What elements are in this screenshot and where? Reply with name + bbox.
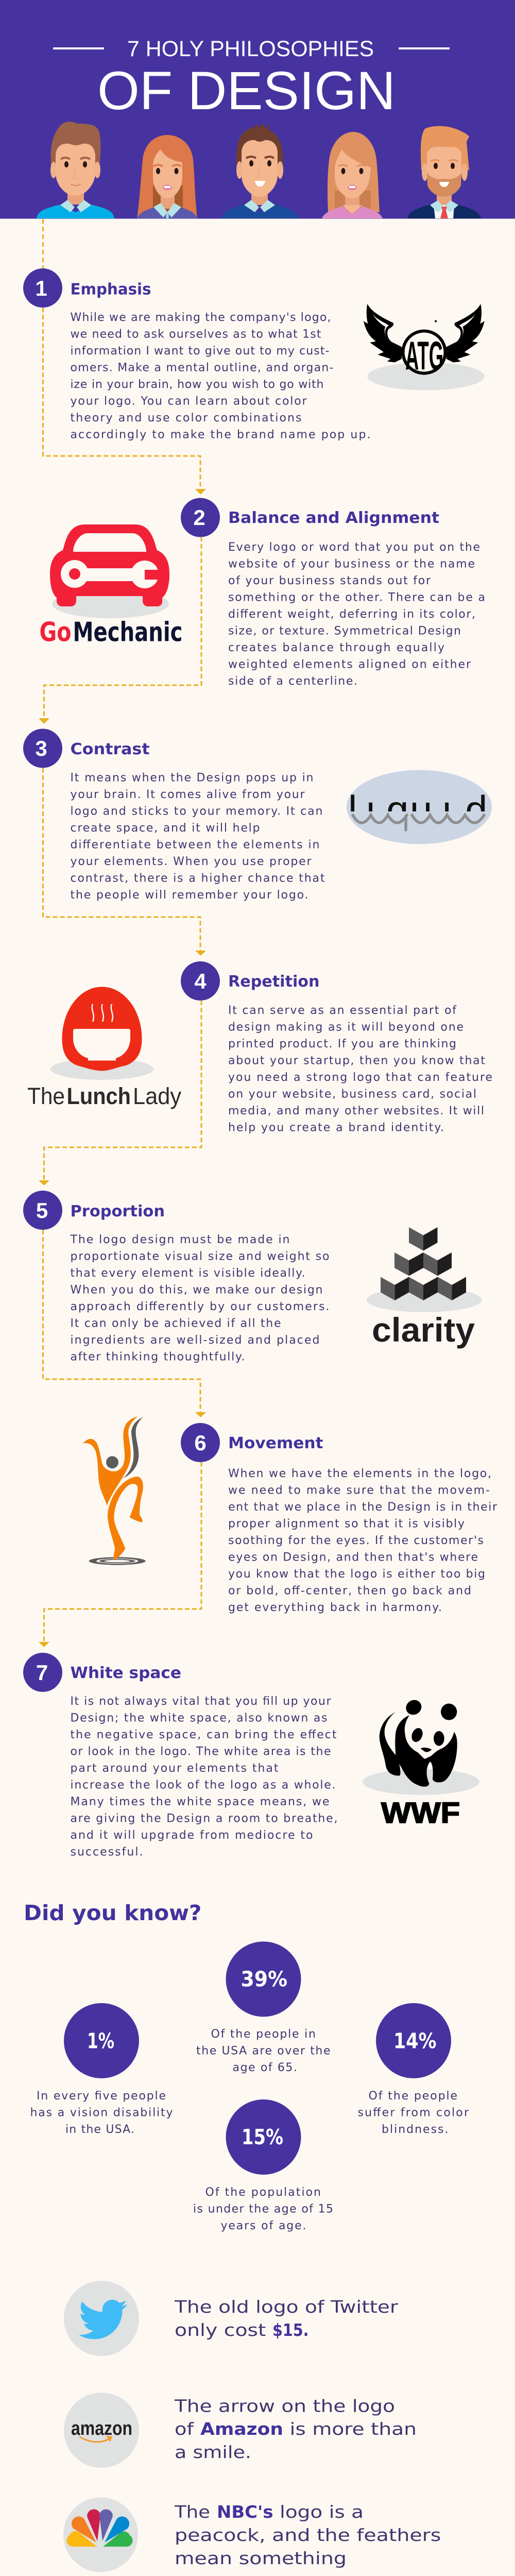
body text: accordingly to make the brand name pop up. — [70, 429, 370, 441]
body text: information I want to give out to my cust- — [70, 345, 330, 358]
body text: are giving the Design a room to breathe, — [70, 1812, 338, 1825]
body text: It can serve as an essential part of — [228, 1004, 457, 1017]
logo: GoMechanic — [39, 524, 182, 648]
body text — [228, 1467, 497, 1614]
body text: weighted elements aligned on either — [228, 658, 471, 671]
illustration: person five — [407, 126, 481, 218]
body text: eyes on Design, and then that's where — [228, 1551, 478, 1564]
logo: GoMechanic: Go — [39, 617, 71, 648]
number badge 6: 6 — [194, 1431, 207, 1455]
body text: different weight, deferring in its color, — [228, 608, 475, 621]
fact: twitter — [64, 2281, 399, 2356]
stat: 1 percent: has a vision disability — [30, 2106, 173, 2120]
body text: theory and use color combinations — [70, 412, 302, 425]
logo: The Lunch Lady: The — [27, 1083, 65, 1109]
logo: clarity: clarity — [372, 1311, 475, 1349]
stat: 14 percent — [357, 2003, 469, 2136]
heading: white space: White space — [70, 1664, 181, 1682]
body text: It can only be achieved if all the — [70, 1317, 281, 1330]
logo: ATG: ATG — [405, 333, 443, 378]
stat: 1 percent — [30, 2003, 173, 2136]
stat: 15 percent: years of age. — [220, 2219, 306, 2232]
title line one: 7 HOLY PHILOSOPHIES — [127, 37, 374, 61]
heading: movement: Movement — [228, 1434, 323, 1452]
body text: contrast, there is a higher chance that — [70, 872, 325, 885]
body text: your logo. You can learn about color — [70, 395, 307, 408]
number badge 5: 5 — [36, 1198, 48, 1223]
body text — [228, 1004, 492, 1134]
amazon fact text: The arrow on the logo — [174, 2396, 395, 2416]
connector: step 4 to step 5 — [39, 1001, 201, 1185]
body text: of your business stands out for — [228, 574, 431, 587]
body text: increase the look of the logo as a whole. — [70, 1778, 336, 1792]
panel: step 4 repetition — [27, 961, 492, 1134]
body text: It is not always vital that you fill up your — [70, 1695, 331, 1708]
heading: did you know: Did you know? — [24, 1901, 202, 1925]
illustration: person four — [322, 132, 383, 218]
stat: 14 percent: blindness. — [382, 2123, 448, 2136]
number badge 4: 4 — [194, 969, 207, 993]
stat: 14 percent: 14% — [393, 2029, 437, 2054]
body text: get everything back in harmony. — [228, 1601, 442, 1614]
body text: design making as it will beyond one — [228, 1021, 464, 1033]
heading: proportion: Proportion — [70, 1202, 165, 1221]
body text: the negative space, can bring the effect — [70, 1728, 337, 1741]
icon: amazon logo: amazon — [71, 2418, 132, 2439]
stat: 39 percent: the USA are over the — [196, 2044, 331, 2058]
NBC fact text: NBC's — [217, 2502, 273, 2522]
heading: emphasis: Emphasis — [70, 280, 151, 299]
body text: we need to ask ourselves as to what 1st — [70, 328, 321, 341]
stat: 14 percent: suffer from color — [357, 2106, 469, 2120]
body text: successful. — [70, 1845, 143, 1859]
amazon fact text — [174, 2396, 417, 2462]
title line two: OF DESIGN — [97, 61, 396, 121]
body text: you know that the logo is either too big — [228, 1568, 485, 1581]
number badge 1: 1 — [35, 276, 47, 300]
NBC fact text: logo is a — [280, 2502, 364, 2522]
NBC fact text: The — [174, 2502, 210, 2522]
body text: The logo design must be made in — [70, 1233, 289, 1246]
body text: your elements. When you use proper — [70, 855, 312, 868]
panel: did you know — [24, 1901, 469, 2232]
body text: Design; the white space, also known as — [70, 1711, 328, 1725]
body text: Every logo or word that you put on the — [228, 541, 480, 554]
body text: part around your elements that — [70, 1762, 279, 1775]
icon: twitter bird — [64, 2281, 139, 2356]
body text: something or the other. There can be a — [228, 591, 485, 604]
body text: media, and many other websites. It will — [228, 1105, 484, 1117]
body text — [228, 541, 485, 688]
number badge 6 — [181, 1423, 220, 1462]
stat: 15 percent: Of the population — [205, 2186, 321, 2199]
NBC fact text: mean something — [175, 2548, 347, 2568]
number badge 2: 2 — [193, 505, 205, 530]
NBC fact text: peacock, and the feathers — [175, 2525, 441, 2545]
panel: step 1 emphasis — [23, 268, 485, 441]
body text: side of a centerline. — [228, 675, 357, 688]
body text: ize in your brain, how you wish to go with — [70, 378, 323, 391]
body text: size, or texture. Symmetrical Design — [228, 624, 461, 638]
stat: 1 percent: in the USA. — [65, 2123, 134, 2136]
stat: 1 percent: In every five people — [37, 2090, 166, 2103]
body text: you need a strong logo that can feature — [228, 1071, 492, 1084]
twitter fact text — [174, 2297, 399, 2340]
connector: step 1 to step 2 — [43, 308, 206, 495]
body text: help you create a brand identity. — [228, 1121, 444, 1134]
logo: liquid: liquid — [348, 787, 487, 833]
stat: 15 percent — [193, 2099, 333, 2232]
body text — [70, 1233, 330, 1363]
body text: about your startup, then you know that — [228, 1054, 485, 1067]
heading: contrast: Contrast — [70, 740, 149, 758]
body text: omers. Make a mental outline, and organ- — [70, 362, 334, 374]
illustration: person one — [37, 122, 114, 218]
body text: we need to make sure that the movem- — [228, 1484, 490, 1497]
amazon fact text: a smile. — [175, 2442, 251, 2462]
body text — [70, 1695, 338, 1859]
twitter fact text: $15. — [272, 2320, 309, 2340]
stat: 15 percent: 15% — [242, 2125, 283, 2149]
body text: that every element is visible ideally. — [70, 1267, 305, 1280]
number badge 4 — [181, 961, 220, 1001]
logo: GoMechanic: Mechanic — [73, 617, 182, 648]
body text: soothing for the eyes. If the customer's — [228, 1534, 484, 1547]
stat: 39 percent: 39% — [241, 1967, 287, 1992]
body text: after thinking thoughtfully. — [70, 1351, 245, 1363]
panel: step 6 movement — [83, 1416, 497, 1614]
title line one — [53, 37, 450, 61]
body text: or look in the logo. The white area is the — [70, 1745, 331, 1758]
body text: When we have the elements in the logo, — [228, 1467, 491, 1480]
fact: amazon — [64, 2393, 417, 2468]
body text: your brain. It comes alive from your — [70, 788, 305, 801]
body text: proper alignment so that it is visibly — [228, 1518, 465, 1530]
twitter fact text: only cost — [175, 2320, 266, 2340]
stat: 14 percent: Of the people — [369, 2090, 457, 2103]
stat: 1 percent: 1% — [87, 2029, 114, 2054]
fact: NBC — [63, 2498, 441, 2572]
body text: proportionate visual size and weight so — [70, 1250, 330, 1263]
logo: The Lunch Lady — [27, 987, 181, 1109]
body text: create space, and it will help — [70, 822, 260, 835]
heading: balance and alignment: Balance and Alignment — [228, 509, 439, 527]
panel: step 7 white space — [23, 1653, 479, 1859]
body text: approach differently by our customers. — [70, 1300, 330, 1313]
body text: printed product. If you are thinking — [228, 1038, 456, 1050]
number badge 3: 3 — [35, 736, 47, 760]
connector: step 6 to step 7 — [39, 1462, 201, 1647]
number badge 1 — [23, 268, 62, 308]
logo: dancing figure — [83, 1416, 146, 1565]
stat: 39 percent — [196, 1941, 331, 2074]
illustration: person three — [221, 123, 298, 218]
stat: 39 percent: Of the people in — [211, 2028, 316, 2041]
body text: While we are making the company's logo, — [70, 311, 331, 324]
body text: the people will remember your logo. — [70, 889, 308, 902]
number badge 3 — [23, 728, 62, 768]
amazon fact text: of — [175, 2419, 195, 2439]
body text: ent that we place in the Design is in their — [228, 1501, 497, 1514]
logo: WWF panda — [363, 1697, 479, 1829]
logo: ATG — [364, 304, 485, 391]
amazon fact text: Amazon — [200, 2419, 283, 2439]
stat: 15 percent: is under the age of 15 — [193, 2203, 333, 2215]
body text: differentiate between the elements in — [70, 839, 319, 851]
heading: repetition: Repetition — [228, 973, 319, 991]
body text: creates balance through equally — [228, 641, 444, 654]
body text: website of your business or the name — [228, 557, 475, 571]
icon: NBC peacock — [63, 2498, 138, 2572]
body text: When you do this, we make our design — [70, 1284, 322, 1296]
body text: on your website, business card, social — [228, 1088, 476, 1100]
logo: WWF panda: WWF — [381, 1797, 460, 1829]
connector: step 5 to step 6 — [43, 1230, 206, 1417]
panel: header — [0, 0, 515, 218]
stat: 39 percent: age of 65. — [233, 2061, 297, 2074]
number badge 5 — [23, 1191, 62, 1230]
number badge 2 — [181, 498, 220, 537]
body text: It means when the Design pops up in — [70, 772, 313, 784]
body text: and it will upgrade from mediocre to — [70, 1829, 313, 1842]
body text — [70, 772, 325, 902]
number badge 7 — [23, 1653, 62, 1692]
twitter fact text: The old logo of Twitter — [174, 2297, 399, 2317]
panel: step 5 proportion — [23, 1191, 482, 1363]
icon: amazon logo — [64, 2393, 139, 2468]
amazon fact text: is more than — [289, 2419, 417, 2439]
body text: Many times the white space means, we — [70, 1795, 330, 1808]
panel: step 2 balance and alignment — [39, 498, 485, 688]
logo: The Lunch Lady: Lunch — [67, 1083, 131, 1109]
NBC fact text — [174, 2502, 441, 2568]
logo: liquid — [347, 770, 492, 844]
illustration: person two — [137, 135, 197, 218]
number badge 7: 7 — [36, 1660, 48, 1685]
body text: or bold, off-center, then go back and — [228, 1585, 471, 1597]
body text: logo and sticks to your memory. It can — [70, 805, 322, 818]
body text — [70, 311, 370, 441]
connector: step 2 to step 3 — [39, 537, 201, 724]
connector: step 3 to step 4 — [43, 768, 206, 956]
panel: step 3 contrast — [23, 728, 492, 902]
logo: The Lunch Lady: Lady — [133, 1083, 181, 1109]
logo: clarity — [367, 1227, 482, 1349]
connector: header to step 1 — [42, 219, 44, 269]
body text: ingredients are well-sized and placed — [70, 1334, 319, 1347]
